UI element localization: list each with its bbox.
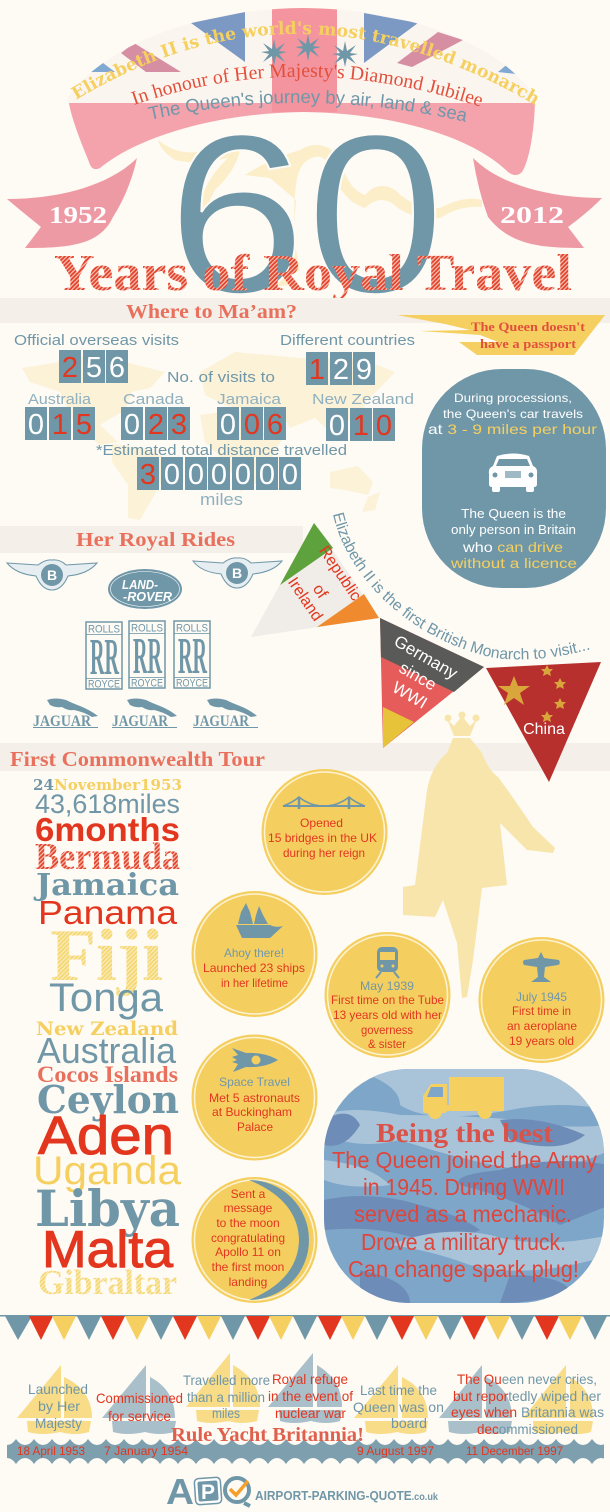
circle: tube: governess <box>361 1023 413 1037</box>
banner text: journey: The Queen's journey by air, land & sea <box>148 90 466 122</box>
circle: bridges: during her reign <box>283 846 365 860</box>
logo letter P <box>194 1477 222 1505</box>
banner heading: world's most travelled monarch: Elizabeth II is the world's most travelled monarch <box>70 20 538 105</box>
logo: rolls royce 3: ROLLS <box>176 622 208 634</box>
Gibraltar: Gibraltar <box>38 1263 177 1302</box>
counter 129: 2 <box>333 354 349 386</box>
stat label: overseas visits: Official overseas visits <box>14 332 179 349</box>
date: last time: 9 August 1997 <box>357 1444 434 1458</box>
counter 010: 0 <box>376 410 392 442</box>
circle: tube: May 1939 <box>360 979 414 993</box>
callout: no passport <box>397 315 605 355</box>
never cries: The Queen never cries, <box>457 1371 597 1387</box>
boat 2 <box>102 1365 176 1434</box>
bunting flag: china: China <box>523 721 565 738</box>
circle: space: at Buckingham <box>212 1105 292 1119</box>
logo: rolls royce 2: ROLLS <box>131 622 163 634</box>
last time <box>353 1382 444 1431</box>
callout: no passport: have a passport <box>480 336 577 351</box>
panel: queen's car: without a licence <box>450 555 577 571</box>
counter 3000000: 0 <box>282 459 298 491</box>
banner tail left: 1952: 1952 <box>49 203 107 229</box>
travelled: miles <box>212 1405 240 1421</box>
heading: Being the best <box>376 1118 553 1148</box>
circle: tube: & sister <box>368 1037 406 1051</box>
counter 006: 0 <box>220 409 236 441</box>
circle: tube: First time on the Tube <box>331 993 444 1007</box>
stats <box>14 332 415 509</box>
circle: aeroplane: July 1945 <box>516 990 567 1004</box>
counter 129: 9 <box>356 354 372 386</box>
last time: Queen was on <box>353 1399 444 1415</box>
counter 3000000: 3 <box>140 459 156 491</box>
panel: queen's car: at 3 - 9 miles per hour <box>428 421 597 437</box>
icon: truck <box>423 1077 504 1119</box>
logo: rolls royce 1: ROLLS <box>88 624 120 636</box>
last time: Last time the <box>360 1382 437 1398</box>
panel: being the best <box>324 1069 610 1303</box>
circle: moon: Apollo 11 on <box>215 1245 281 1259</box>
duration: 6months <box>35 811 180 848</box>
circle: ships <box>192 891 318 1017</box>
counter 023 <box>121 407 190 441</box>
counter 3000000: 0 <box>211 459 227 491</box>
counter 006: 6 <box>267 409 283 441</box>
camouflage <box>324 1069 610 1303</box>
decorative river map behind 60 <box>158 140 482 292</box>
logo: bentley right <box>193 558 282 588</box>
Tonga: Tonga <box>49 976 164 1020</box>
circle: bridges <box>262 769 388 895</box>
counter 015: 0 <box>28 409 44 441</box>
royal refuge: nuclear war <box>275 1405 346 1421</box>
panel: being the best: in 1945. During WWII <box>363 1174 565 1200</box>
banner <box>7 8 602 248</box>
panel: queen's car <box>422 369 606 588</box>
never cries <box>451 1371 604 1437</box>
union flag arch <box>69 8 535 175</box>
Malta: Malta <box>42 1221 173 1279</box>
circle: aeroplane: an aeroplane <box>507 1019 577 1033</box>
logo: jaguar 1: JAGUAR <box>33 713 91 730</box>
panel: being the best: The Queen joined the Army <box>332 1147 597 1173</box>
callout: no passport: The Queen doesn't <box>471 319 586 334</box>
panel: being the best: served as a mechanic. <box>354 1201 572 1227</box>
circle: space: Space Travel <box>219 1075 290 1089</box>
timeline text <box>17 1371 604 1458</box>
circle: ships: in her lifetime <box>221 976 288 990</box>
section band: royal rides: Her Royal Rides <box>76 529 235 551</box>
stat label: countries: Different countries <box>280 332 415 349</box>
logo: land rover: -ROVER <box>123 589 173 604</box>
counter 023: 2 <box>148 409 164 441</box>
icon: plane <box>523 952 560 982</box>
counter 256: 2 <box>62 352 78 384</box>
banner text: diamond jubilee: In honour of Her Majesty's Diamond Jubilee <box>130 64 482 106</box>
section band: commonwealth tour: First Commonwealth Tour <box>10 747 265 771</box>
text: RR <box>133 628 163 685</box>
Jamaica: Jamaica <box>33 868 179 903</box>
counter 3000000: 0 <box>235 459 251 491</box>
counter 010: 1 <box>353 410 369 442</box>
label: New Zealand: New Zealand <box>312 391 414 408</box>
royal refuge <box>268 1371 353 1421</box>
Ceylon: Ceylon <box>37 1077 179 1122</box>
world map <box>22 352 395 520</box>
never cries: eyes when Britannia was <box>451 1404 604 1420</box>
counter 015: 1 <box>52 409 68 441</box>
icon: bridge <box>283 797 365 809</box>
circle: moon <box>192 1177 318 1303</box>
logo: jaguar 3: JAGUAR <box>193 713 249 730</box>
section band: commonwealth tour <box>0 743 610 771</box>
commissioned <box>96 1390 183 1424</box>
date: launched: 18 April 1953 <box>17 1444 85 1458</box>
boats <box>17 1353 593 1434</box>
circle: space: Palace <box>237 1120 273 1134</box>
banner tail right: 2012: 2012 <box>500 203 564 229</box>
bunting flag: china <box>486 662 601 782</box>
text: RR <box>178 628 208 685</box>
panel: queen's car: During processions, <box>454 391 572 405</box>
circle: moon: congratulating <box>211 1231 285 1245</box>
New Zealand: New Zealand <box>36 1018 178 1040</box>
counter 023: 0 <box>124 409 140 441</box>
launched: by Her <box>38 1398 80 1414</box>
panel: queen's car: only person in Britain <box>451 522 576 537</box>
counter 023: 3 <box>171 409 187 441</box>
counter 256: 5 <box>86 352 102 384</box>
counter 010 <box>326 408 395 442</box>
royal refuge: in the event of <box>268 1388 353 1404</box>
stars <box>261 34 358 67</box>
boat 3 <box>186 1353 260 1423</box>
counter 3000000: 0 <box>188 459 204 491</box>
icon: train <box>376 947 399 978</box>
Cocos Islands: Cocos Islands <box>37 1062 178 1087</box>
logo: bentley left: B <box>47 567 57 583</box>
logo: jaguar 1 <box>33 698 98 730</box>
commissioned: for service <box>108 1408 171 1424</box>
counter 015: 5 <box>76 409 92 441</box>
circle: space: Met 5 astronauts <box>209 1091 300 1105</box>
bunting flag: ireland: of <box>309 581 331 602</box>
counter 3000000 <box>137 457 301 491</box>
circle: moon: message <box>224 1201 273 1215</box>
circle: moon: the first moon <box>212 1260 284 1274</box>
label: miles: miles <box>200 490 243 509</box>
bunting flag: germany: Germany <box>391 632 461 683</box>
circle: moon: Sent a <box>231 1187 266 1201</box>
circle: bridges: Opened <box>300 816 343 830</box>
logo: bentley right: B <box>232 565 242 581</box>
logo: jaguar 3 <box>193 698 258 730</box>
boat 5 <box>354 1365 428 1434</box>
bunting flag: germany: WWI <box>389 678 430 713</box>
logo: airport parking quote <box>166 1471 438 1512</box>
section band: where to ma'am: Where to Ma’am? <box>126 301 297 323</box>
text: RR <box>90 629 120 686</box>
never cries: but reportedly wiped her <box>453 1388 601 1404</box>
tour word list <box>33 776 182 1302</box>
distance: 43,618miles <box>35 789 180 819</box>
date: decommissioned: 11 December 1997 <box>466 1444 563 1458</box>
bunting caption: Elizabeth II is the first British Monarch to visit... <box>333 512 590 660</box>
logo letter A: A <box>166 1471 194 1512</box>
Libya: Libya <box>35 1179 180 1238</box>
label: Australia: Australia <box>28 391 92 408</box>
bunting flag: ireland <box>251 523 379 637</box>
icon: ship <box>236 903 283 938</box>
royal refuge: Royal refuge <box>272 1371 348 1387</box>
icon: rocket <box>232 1048 278 1072</box>
label: Canada: Canada <box>123 391 185 408</box>
label: number of visits: No. of visits to <box>167 369 275 386</box>
logo: rolls royce 2: ROYCE <box>131 678 163 690</box>
queen silhouette <box>403 712 555 998</box>
logo: jaguar 2 <box>112 698 177 730</box>
boat 4 <box>268 1353 342 1423</box>
boat 1 <box>17 1365 92 1434</box>
Fiji: Fiji <box>50 915 163 997</box>
last time: board <box>391 1415 427 1431</box>
counter 256 <box>59 350 128 384</box>
launched <box>28 1381 88 1431</box>
logo: rolls royce 1 <box>86 622 122 690</box>
counter 3000000: 0 <box>164 459 180 491</box>
logo letter P: P <box>201 1481 215 1504</box>
date: 24November1953 <box>33 776 182 794</box>
date: commissioned: 7 January 1954 <box>104 1444 188 1458</box>
counter 015 <box>25 407 95 441</box>
counter 256: 6 <box>109 352 125 384</box>
icon: crescent moon <box>249 1180 309 1300</box>
never cries: decommissioned <box>477 1421 578 1437</box>
circle: moon: to the moon <box>216 1216 280 1230</box>
logo: jaguar 2: JAGUAR <box>112 713 168 730</box>
Australia: Australia <box>37 1030 177 1071</box>
big number 60: 60 <box>167 87 445 340</box>
logo: rolls royce 2 <box>129 621 165 690</box>
circle: tube <box>324 932 450 1058</box>
bunting flag: ireland: Republic <box>315 543 364 604</box>
banner tail left: 1952 <box>7 158 137 248</box>
logo: bentley left <box>7 560 97 590</box>
counter 3000000: 0 <box>259 459 275 491</box>
circle: moon: landing <box>229 1275 267 1289</box>
launched: Launched <box>28 1381 88 1397</box>
circle: ships: Ahoy there! <box>224 946 284 960</box>
panel: being the best: Drove a military truck. <box>361 1229 566 1255</box>
icon: car <box>489 454 537 492</box>
counter 006 <box>217 407 286 441</box>
banner tail right: 2012 <box>473 158 602 248</box>
circle: aeroplane: First time in <box>512 1004 571 1018</box>
Bermuda: Bermuda <box>35 836 180 878</box>
section band: royal rides <box>0 526 303 553</box>
launched: Majesty <box>35 1415 82 1431</box>
logo: land rover: LAND- <box>122 577 158 592</box>
label: Jamaica: Jamaica <box>217 391 282 408</box>
logo tick <box>225 1478 250 1506</box>
section band: where to ma'am <box>0 298 610 323</box>
label: estimated distance: *Estimated total distance travelled <box>96 442 347 459</box>
travelled <box>183 1372 270 1421</box>
bunting row <box>0 1315 610 1340</box>
Panama: Panama <box>38 894 178 931</box>
Uganda: Uganda <box>33 1149 182 1193</box>
counter 129: 1 <box>309 354 325 386</box>
circle: ships: Launched 23 ships <box>203 961 305 975</box>
boat 6 <box>439 1365 512 1434</box>
logo: rolls royce 1: ROYCE <box>88 678 120 690</box>
circle: aeroplane: 19 years old <box>509 1034 574 1048</box>
panel: being the best: Can change spark plug! <box>348 1256 579 1282</box>
panel: queen's car: the Queen's car travels <box>443 407 583 421</box>
circle: space <box>192 1034 318 1160</box>
commissioned: Commissioned <box>96 1390 183 1406</box>
panel: queen's car: The Queen is the <box>461 506 566 521</box>
circle: tube: 13 years old with her <box>333 1008 442 1022</box>
counter 010: 0 <box>329 410 345 442</box>
boat 7 <box>523 1365 593 1434</box>
bunting flag: germany <box>380 618 484 748</box>
travelled: Travelled more <box>183 1372 270 1388</box>
counter 006: 0 <box>244 409 260 441</box>
circle: bridges: 15 bridges in the UK <box>268 831 377 845</box>
logo: rolls royce 3: ROYCE <box>176 678 208 690</box>
logo: land rover <box>108 569 182 609</box>
Aden: Aden <box>38 1106 174 1166</box>
logo: rolls royce 3 <box>174 621 210 690</box>
rule britannia heading: Rule Yacht Britannia! <box>171 1424 364 1446</box>
panel: queen's car: who can drive <box>462 539 563 555</box>
bunting flag: germany: since <box>396 658 440 694</box>
circle: aeroplane <box>478 937 604 1063</box>
counter 129 <box>306 352 375 386</box>
travelled: than a million <box>187 1389 265 1405</box>
title: Years of Royal Travel <box>54 245 572 302</box>
wave band <box>7 1439 604 1464</box>
logo wordmark: AIRPORT-PARKING-QUOTE.co.uk <box>255 1488 438 1503</box>
bunting flag: ireland: Ireland <box>284 574 325 625</box>
